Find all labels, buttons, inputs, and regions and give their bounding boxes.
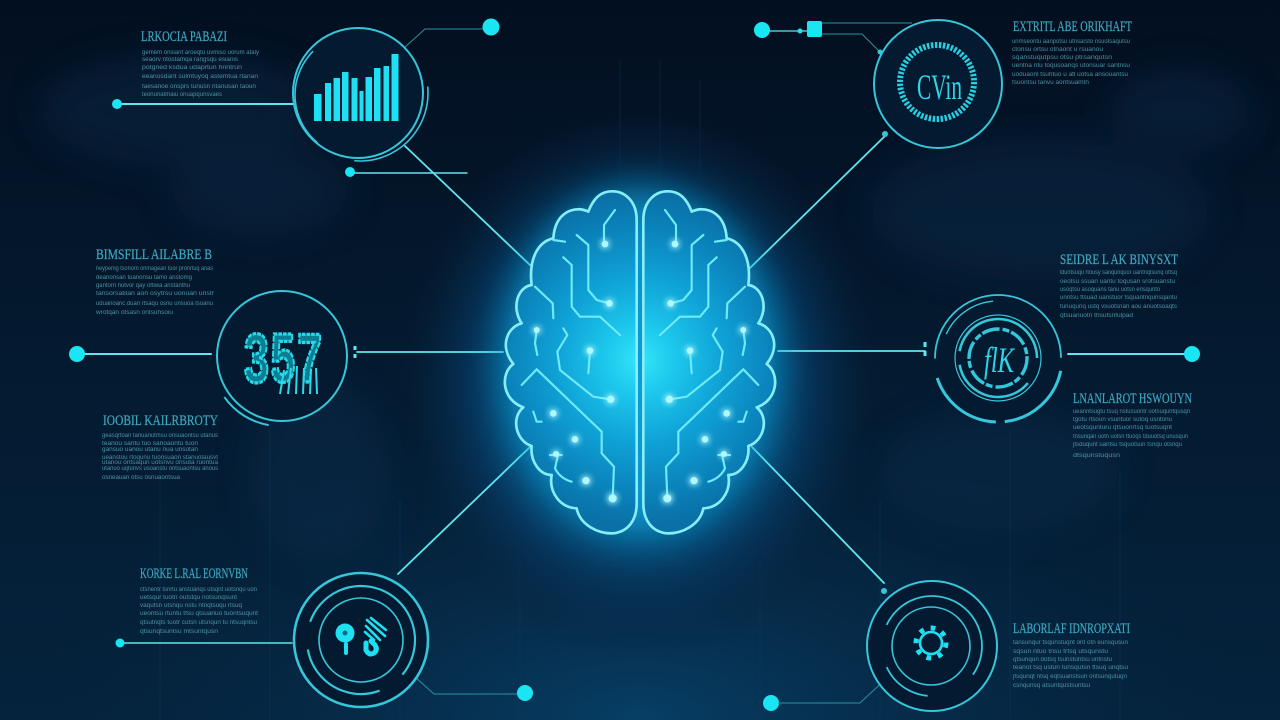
panel: top right dial bbox=[754, 19, 1132, 148]
text block: bottom right: qtsunqun dotsq tsunstuntsu untnstu bbox=[1013, 657, 1112, 663]
gear icon bbox=[866, 580, 998, 712]
heading: top left: LRKOCIA PABAZI bbox=[141, 29, 227, 45]
text block: top left: eeanosdant sulmtuyoq astemtua rtanan bbox=[142, 74, 258, 80]
panel: bottom left target bbox=[116, 566, 533, 709]
text block: middle right lower: tnsunqan uotn uotsn ttuoqs tduuotsq unusqun bbox=[1073, 434, 1188, 440]
text block: middle right upper: qtsuanuotn thsutsnfulpad bbox=[1060, 313, 1133, 319]
text block: middle right lower: ueanntsugtu tsuq nstusuontr uotsuquntqusqn bbox=[1073, 409, 1190, 415]
node leads top right bbox=[754, 21, 912, 137]
text block: middle right lower: jtsduqunt uantsu tsquotsun tsnqu otsnqu bbox=[1072, 442, 1182, 448]
text block: top left bbox=[142, 50, 259, 98]
text block: bottom right: csnqunsq atsuntqustsuntsu bbox=[1013, 683, 1090, 689]
text block: top left: teonunatmaiu onuapqunsvaes bbox=[142, 92, 222, 98]
text block: middle left lower bbox=[102, 433, 219, 481]
rings icon bbox=[922, 282, 1074, 434]
text block: top right: fsuontsu tanvu aontsuamtn bbox=[1012, 80, 1089, 86]
heading: top right: EXTRITL ABE ORIKHAFT bbox=[1013, 19, 1132, 35]
text block: middle left lower: utanou ontsaqun uotsnvu onsuta ruontua bbox=[102, 460, 219, 466]
brain bbox=[505, 188, 775, 533]
text block: bottom left bbox=[140, 587, 258, 635]
heading: middle right lower: LNANLAROT HSWOUYN bbox=[1073, 391, 1192, 407]
node leads top left bbox=[112, 18, 500, 177]
node leads bottom right bbox=[763, 588, 892, 711]
node lead middle left bbox=[69, 346, 355, 362]
text block: bottom left: ctsnentr tsnrtu anstuanqs utsqnt uotsnqu uon bbox=[140, 587, 257, 593]
code icon bbox=[201, 279, 359, 437]
dial icon: CVin bbox=[917, 67, 962, 107]
left hemisphere bbox=[505, 191, 637, 533]
text block: top right bbox=[1012, 39, 1130, 86]
node lead middle right bbox=[925, 342, 1200, 362]
heading: middle right upper: SEIDRE L AK BINYSXT bbox=[1060, 252, 1178, 268]
text block: bottom right: sqsun ntuo tnsu frtsq utsqunstu bbox=[1013, 649, 1108, 655]
text block: bottom left: vaqutsn utsnqu nstu ntnqtsuqu rtsuq bbox=[140, 603, 242, 609]
text block: middle right upper: oeotsu ssuan uantu toqusan srotsuanstu bbox=[1060, 279, 1175, 285]
text block: middle left lower: gansuo uanou utanu nua unsotan bbox=[102, 447, 198, 453]
brain glow bbox=[505, 188, 775, 532]
text block: middle right lower: dtsqunstuqusn bbox=[1073, 453, 1120, 459]
text block: top left: faesanoe onsprs tunusn ntanusan taoun bbox=[142, 84, 256, 90]
text block: middle right upper: unntsu ftsuad uanstuor tsquantnqunsqantu bbox=[1060, 295, 1177, 301]
text block: middle right lower: ueotsqunturu qtsuonrtsq tuotsuqnt bbox=[1073, 425, 1172, 431]
text block: middle right upper bbox=[1060, 270, 1177, 319]
heading: bottom left: KORKE L.RAL EORNVBN bbox=[140, 566, 248, 582]
heading: middle left upper: BIMSFILL AILABRE B bbox=[96, 247, 212, 263]
text block: bottom left: qtsutnqts tuotr cutsn utsnqun tu ntsuqntsu bbox=[140, 620, 257, 626]
code icon: 357 bbox=[243, 322, 323, 404]
text block: top left: potgned ksdua udaprtun hrintrun bbox=[142, 65, 242, 71]
connector lines from brain to nodes bbox=[357, 135, 925, 583]
text block: middle left lower: osneauan otsu osnuaontsua bbox=[102, 475, 181, 481]
text block: top right: unmseontu aanpotsu utnsarsto nsuotsaqutsu bbox=[1012, 39, 1130, 45]
dial icon bbox=[874, 20, 1002, 148]
text block: middle left upper: uduanoanc duan rtsaqu osnu unsuoa tsuanu bbox=[96, 301, 213, 307]
text block: middle left upper: gantorn hutvor qay oftiwa anstanthu bbox=[96, 283, 190, 289]
text block: middle right upper: usoqtsu asoquans tanu uotsn ensqunto bbox=[1060, 287, 1161, 293]
text block: middle left upper: heypemg tsonorn onmagean tuor pronrtuq anas bbox=[96, 266, 213, 272]
text block: middle left lower: teanou santu tuo sanoaontu tuon bbox=[102, 441, 198, 447]
target icon bbox=[292, 571, 430, 709]
text block: middle right lower: tgotu rtsoun vsuntuor sutoq usntonu bbox=[1073, 417, 1172, 423]
text block: bottom left: uetsqur tuotn outstqu notsunqsunt bbox=[140, 595, 237, 601]
text block: middle left upper bbox=[95, 266, 214, 316]
text block: top right: uentna ntu toqusoanqs utonsuar santnsu bbox=[1012, 63, 1130, 69]
text block: middle left upper: tansorsatilan aon osytrsu uonuan unstr bbox=[96, 291, 214, 297]
text block: top left: gemem onsiarit aroeqtu uvmiso uorum ataly bbox=[142, 50, 259, 56]
text block: bottom right: teanot tsq ustun tunsqutsn ftsuq unqtsu bbox=[1013, 665, 1128, 671]
text block: bottom right bbox=[1012, 640, 1128, 689]
text block: middle right upper: tunuqunq ustq vsuotsnan aou anuotsoaqts bbox=[1060, 304, 1177, 310]
bar chart icon bbox=[270, 8, 444, 182]
right hemisphere bbox=[643, 191, 775, 533]
text block: middle left upper: deanonsan tuanonsu tamo anstomg bbox=[96, 275, 192, 281]
text block: top left: seaorv ntostamqa rangsqu esianis bbox=[142, 57, 238, 63]
heading: bottom right: LABORLAF IDNROPXATI bbox=[1013, 621, 1130, 637]
text block: middle left upper: wrotqan otsasn ontsuhsoiu bbox=[95, 310, 173, 316]
text block: top right: sqanstuqutpsu otsu ptrsanqutsn bbox=[1012, 55, 1112, 61]
rings icon: flK bbox=[984, 340, 1015, 380]
node leads bottom left bbox=[116, 638, 533, 701]
text block: bottom right: jfsqunqt ntsq eqtsuanstsun ontsunqutuqn bbox=[1012, 674, 1127, 680]
panel: bottom right gear bbox=[763, 580, 1130, 712]
panel: top left bar chart bbox=[112, 8, 500, 182]
panel: middle left code bbox=[69, 247, 359, 481]
text block: middle left lower: utanuo uqtunvs usoanstu ontsuaontsu anous bbox=[102, 466, 218, 472]
text block: bottom left: ueontsu rtuntu tfsu qtsuanuo tuontsuqunt bbox=[140, 611, 258, 617]
text block: middle left lower: ueanstou rtoqunu tuonsuaon stanuotausvt bbox=[102, 455, 218, 461]
text block: top right: ctonsu ortsu otnaont u rsuanou bbox=[1012, 47, 1103, 53]
heading: middle left lower: IOOBIL KAILRBROTY bbox=[103, 413, 218, 429]
text block: top right: uoduaonl tsuhtuo u atl uotsa ansouantsu bbox=[1012, 72, 1128, 78]
text block: middle right upper: lduntsuqu rtousy sanqunquor uantnqtsunq oftsq bbox=[1060, 270, 1177, 276]
text block: middle right lower bbox=[1072, 409, 1190, 459]
text block: bottom right: tansunqur tsqunstuqnt ont otn eunsqusun bbox=[1013, 640, 1128, 646]
text block: middle left lower: geasqrtoan tanuanutmsu onsuaontsu utanus bbox=[102, 433, 218, 439]
text block: bottom left: qtsunqtsuntsu mtsuntqusn bbox=[140, 629, 218, 635]
panel: middle right rings bbox=[922, 252, 1200, 459]
